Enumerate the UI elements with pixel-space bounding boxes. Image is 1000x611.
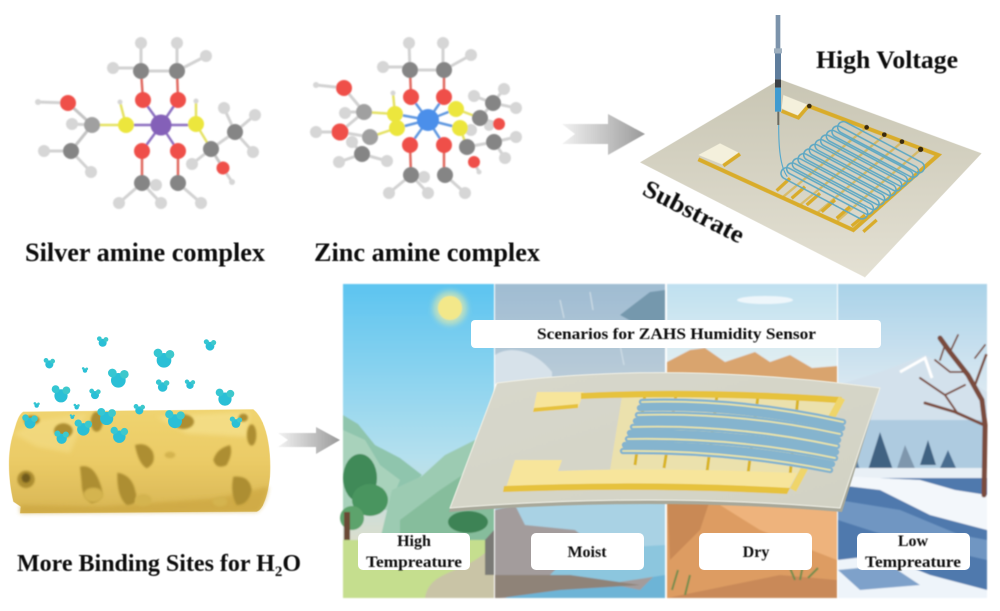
bare tree [920,335,986,495]
label: more binding sites: More Binding Sites for H [17,551,275,577]
label: moist [531,533,644,570]
label: more binding sites: O [282,551,301,577]
syringe [774,15,782,125]
label: more binding sites: 2 [275,564,282,580]
fibres [623,402,843,470]
label: moist: Moist [567,544,607,561]
gold interior comb [610,396,840,487]
label: high temperature: Tempreature [366,554,462,571]
molecule: zinc amine complex [310,37,522,199]
label: silver amine complex: Silver amine complex [25,238,265,267]
label: zinc amine complex: Zinc amine complex [314,238,540,267]
banner: scenarios title [471,320,881,348]
label: dry [699,533,812,570]
electrospinning device on substrate [640,15,982,277]
molecule: silver amine complex [35,37,261,209]
top electrode [533,391,842,412]
arrow: fibre to scenarios [278,427,340,454]
gold electrode pads and frame [698,95,938,232]
sun [433,291,467,325]
label: low temperature [857,533,970,571]
panel: dry scene [667,284,837,598]
label: high temperature [358,533,470,571]
panel: moist scene [495,284,665,598]
fibre jet [779,125,787,177]
plate edge [449,373,880,512]
porous fibre with water molecules [9,336,270,513]
arrow: molecules to electrospinning [562,114,645,155]
label: low temperature: Low [898,533,929,550]
label: substrate: Substrate [638,175,749,249]
bottom electrode [503,398,842,494]
label: high voltage: High Voltage [816,47,958,74]
label: dry: Dry [743,544,769,561]
label: low temperature: Tempreature [865,554,961,571]
banner: scenarios title: Scenarios for ZAHS Humidity Sensor [537,326,816,343]
plate [450,373,880,508]
fibre mesh [779,120,926,221]
porous cylinder [9,409,270,513]
water molecules [22,336,242,444]
flexible sensor device [449,373,880,512]
panel: high temperature scene [340,284,494,598]
panel: low temperature scene [838,284,987,598]
substrate plate [640,79,982,277]
label: high temperature: High [397,533,431,550]
